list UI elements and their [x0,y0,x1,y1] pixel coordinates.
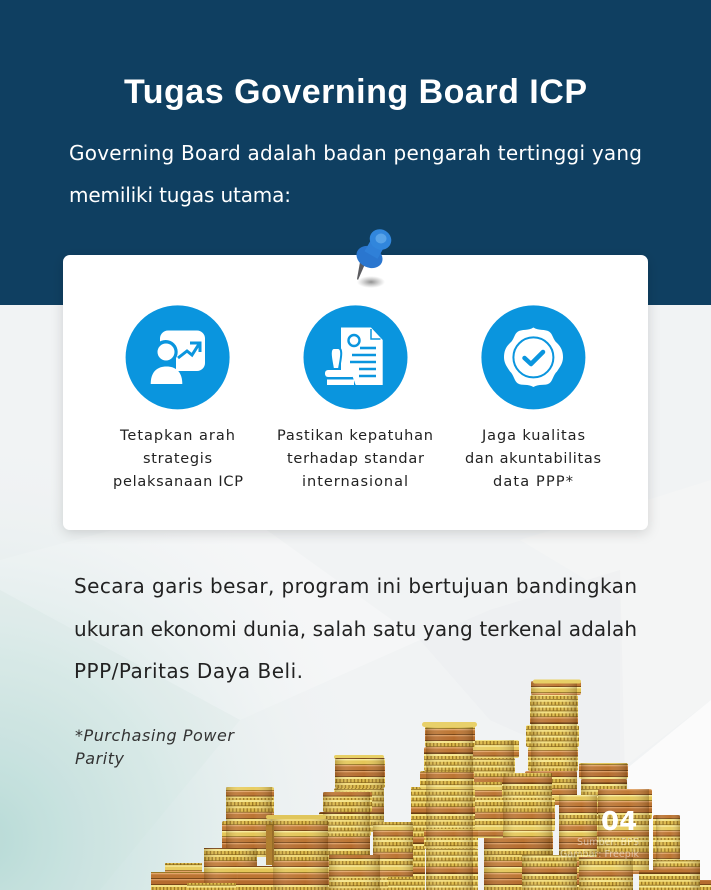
icon: document and stamp [304,305,408,409]
source credits: Sumber: BPS [577,837,639,848]
page number: 04 [601,807,637,837]
icon: push pin [353,225,395,288]
source credits [560,837,639,860]
text: direction [113,428,243,490]
text: quality: Jaga kualitas [481,428,585,444]
intro text: memiliki tugas utama: [69,183,291,207]
icon: quality badge [481,305,585,409]
footnote: Parity [75,749,125,768]
front stack: centre [420,722,478,890]
header band [0,0,711,305]
source credits: Gambar: Freepik [560,849,639,860]
panel: duties card [63,255,648,530]
body paragraph [74,574,637,683]
intro text [69,141,642,207]
text: compliance [277,428,433,490]
text: compliance: terhadap standar [287,451,424,467]
background: light faceted panel [0,305,711,890]
coin stacks [151,680,711,890]
icon: strategy presentation [126,305,230,409]
body paragraph: ukuran ekonomi dunia, salah satu yang terkenal adalah [74,617,637,641]
footnote [75,726,235,768]
text: direction: pelaksanaan ICP [113,474,243,490]
text: direction: strategis [143,451,212,467]
title: Tugas Governing Board ICP [124,73,587,111]
body paragraph: Secara garis besar, program ini bertujuan bandingkan [74,574,637,598]
text: compliance: internasional [302,474,408,490]
back stack: tallest [525,680,581,805]
text: compliance: Pastikan kepatuhan [277,428,433,444]
text: quality: dan akuntabilitas [465,451,601,467]
text: quality [465,428,601,490]
text: quality: data PPP* [493,474,573,490]
body paragraph: PPP/Paritas Daya Beli. [74,659,303,683]
intro text: Governing Board adalah badan pengarah tertinggi yang [69,141,642,165]
footnote: *Purchasing Power [75,726,235,745]
text: direction: Tetapkan arah [119,428,235,444]
